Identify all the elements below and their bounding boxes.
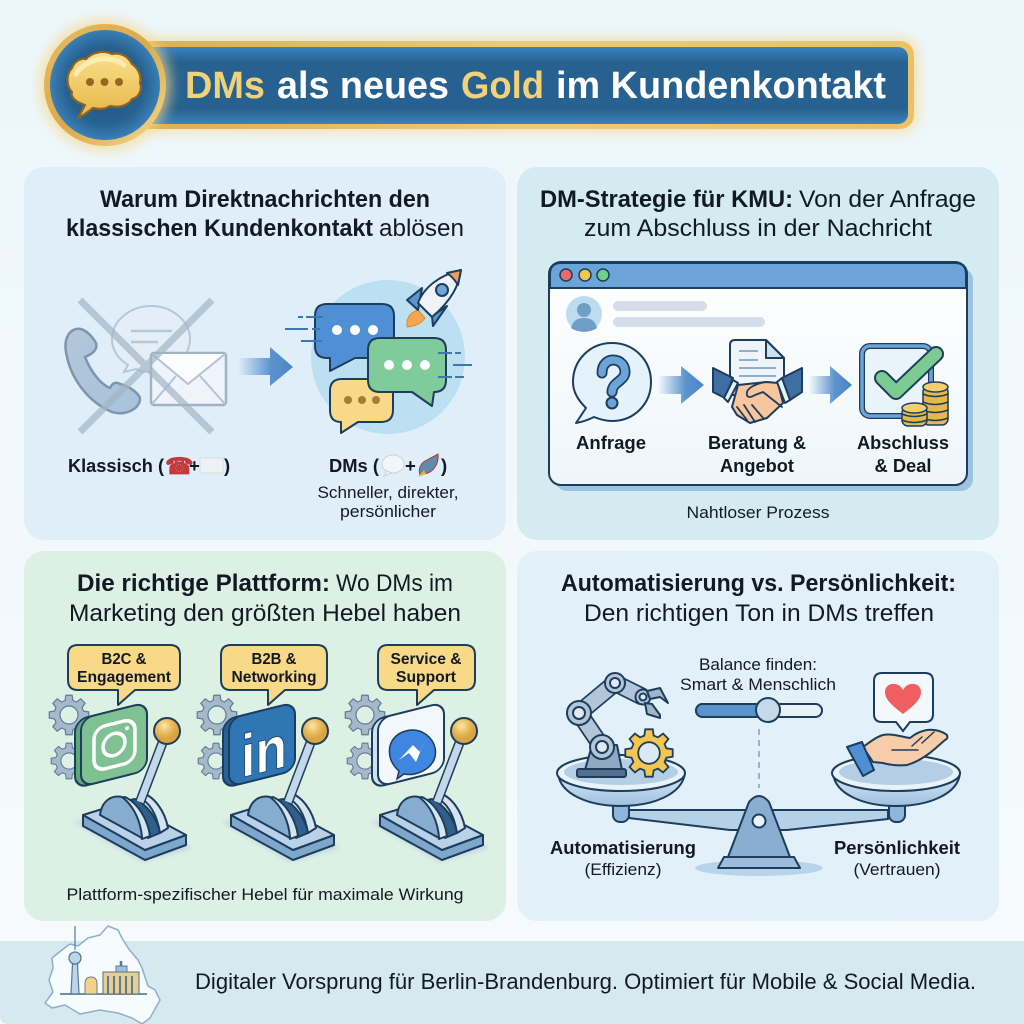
- heading: Marketing den größten Hebel haben: [69, 600, 461, 627]
- callout: Engagement: [77, 669, 172, 686]
- label: DMs: DMs (: [329, 455, 380, 476]
- label: Klassisch: ☎: [165, 454, 194, 480]
- title words: Gold: [461, 65, 544, 107]
- footer: [0, 926, 1024, 1024]
- caption: DM benefits: persönlicher: [340, 502, 436, 521]
- labels: [550, 837, 960, 879]
- step labels: Anfrage: [576, 432, 646, 453]
- title words: als neues: [277, 65, 449, 107]
- icon: rocket: [407, 270, 461, 327]
- icon: Berlin map: [45, 926, 160, 1024]
- app tile: [75, 702, 147, 788]
- callout: [378, 645, 475, 705]
- profile avatar: [566, 296, 602, 332]
- step labels: Abschluss: [857, 432, 949, 453]
- step labels: Angebot: [720, 455, 794, 476]
- label: Klassisch: +: [189, 455, 200, 476]
- platform: Messenger: [345, 645, 489, 862]
- arrow: [809, 366, 852, 404]
- step labels: [576, 432, 949, 476]
- icon: DM bubbles group: [285, 270, 472, 434]
- heading: DM-Strategie für KMU:: [540, 186, 793, 213]
- label: DMs: ): [441, 455, 447, 476]
- panel: platforms: [24, 551, 506, 921]
- browser window: [549, 262, 973, 491]
- heading: Die richtige Plattform:: [77, 570, 330, 597]
- heading: ablösen: [379, 215, 464, 242]
- beam: [629, 810, 888, 830]
- labels: Automatisierung: [550, 837, 696, 858]
- caption: Plattform-spezifischer Hebel für maximale Wirkung: [66, 885, 464, 904]
- banner bar: [130, 41, 914, 129]
- app tile: [223, 702, 295, 791]
- lever: [222, 718, 340, 862]
- banner glow: [140, 38, 918, 132]
- speed lines: [285, 317, 323, 341]
- heading: zum Abschluss in der Nachricht: [584, 215, 932, 242]
- balance text: Balance finden:: [699, 655, 817, 674]
- heading: [69, 570, 461, 627]
- banner blue fill: [130, 47, 908, 124]
- panel: automation vs personality: [517, 551, 999, 921]
- caption: Nahtloser Prozess: [686, 503, 830, 522]
- icon: phone handset: [65, 329, 140, 413]
- heading: Warum Direktnachrichten den: [100, 186, 430, 213]
- blue chat bubble: [315, 304, 394, 371]
- app tile: [372, 702, 444, 788]
- heading: Wo DMs im: [336, 570, 453, 597]
- step labels: & Deal: [874, 455, 932, 476]
- callout: Service &: [390, 651, 462, 668]
- label: Klassisch: Klassisch (: [68, 455, 165, 476]
- heading: [561, 570, 956, 627]
- icon: question bubble: [573, 343, 651, 423]
- icon: old speech bubble: [112, 306, 190, 372]
- icon: heart bubble: [874, 673, 933, 731]
- gears: [197, 695, 237, 779]
- label: DMs: +: [405, 455, 416, 476]
- icon: envelope: [151, 353, 226, 405]
- icon: gold medallion: [39, 19, 171, 151]
- platform: Instagram: [49, 645, 192, 862]
- heading: klassischen Kundenkontakt: [66, 215, 373, 242]
- panel: classic contact vs DMs: [24, 167, 506, 540]
- scale: [557, 755, 960, 876]
- icon: crossed out mark: [80, 300, 212, 432]
- footer text: Digitaler Vorsprung für Berlin-Brandenburg. Optimiert für Mobile & Social Media.: [195, 969, 976, 994]
- balance text: Smart & Menschlich: [680, 675, 836, 694]
- platform: LinkedIn: [197, 645, 340, 862]
- gears: [49, 695, 89, 779]
- label: Klassisch: [68, 454, 230, 480]
- icon: robot arm: [567, 673, 668, 777]
- labels: (Effizienz): [584, 860, 662, 879]
- lever: [371, 718, 489, 862]
- title words: DMs: [185, 65, 265, 107]
- callout: Support: [396, 669, 457, 686]
- icon: checkbox with coins: [862, 346, 948, 426]
- caption: DM benefits: [318, 483, 458, 521]
- title banner: [39, 19, 918, 151]
- callout: Networking: [232, 669, 316, 686]
- caption: DM benefits: Schneller, direkter,: [318, 483, 458, 502]
- callout: [221, 645, 327, 705]
- lever: [74, 718, 192, 862]
- heading: Den richtigen Ton in DMs treffen: [584, 600, 934, 627]
- label: Klassisch: ): [224, 455, 230, 476]
- balance text: [680, 655, 836, 694]
- panel: DM strategy: [517, 167, 999, 540]
- heading: Automatisierung vs. Persönlichkeit:: [561, 570, 956, 597]
- callout: [68, 645, 180, 705]
- callout: B2C &: [102, 651, 147, 668]
- gears: [345, 695, 385, 779]
- arrow: [658, 366, 704, 404]
- labels: (Vertrauen): [854, 860, 940, 879]
- heading: Von der Anfrage: [799, 186, 976, 213]
- title words: [185, 65, 886, 107]
- title words: im Kundenkontakt: [556, 65, 886, 107]
- label: DMs: [329, 454, 447, 477]
- heading: [540, 186, 976, 242]
- step labels: Beratung &: [708, 432, 806, 453]
- app tile: in: [241, 712, 287, 791]
- slider: [696, 698, 822, 722]
- green chat bubble: [368, 338, 446, 406]
- fulcrum: [728, 796, 790, 857]
- icon: yellow gear: [625, 729, 673, 777]
- icon: open hand: [847, 730, 947, 776]
- icon: handshake with document: [713, 340, 802, 423]
- right pan: [832, 755, 960, 806]
- labels: Persönlichkeit: [834, 837, 960, 858]
- left pan: [557, 755, 685, 806]
- callout: B2B &: [252, 651, 297, 668]
- arrow: [238, 347, 293, 386]
- yellow chat bubble: [330, 379, 393, 433]
- heading: [66, 186, 464, 242]
